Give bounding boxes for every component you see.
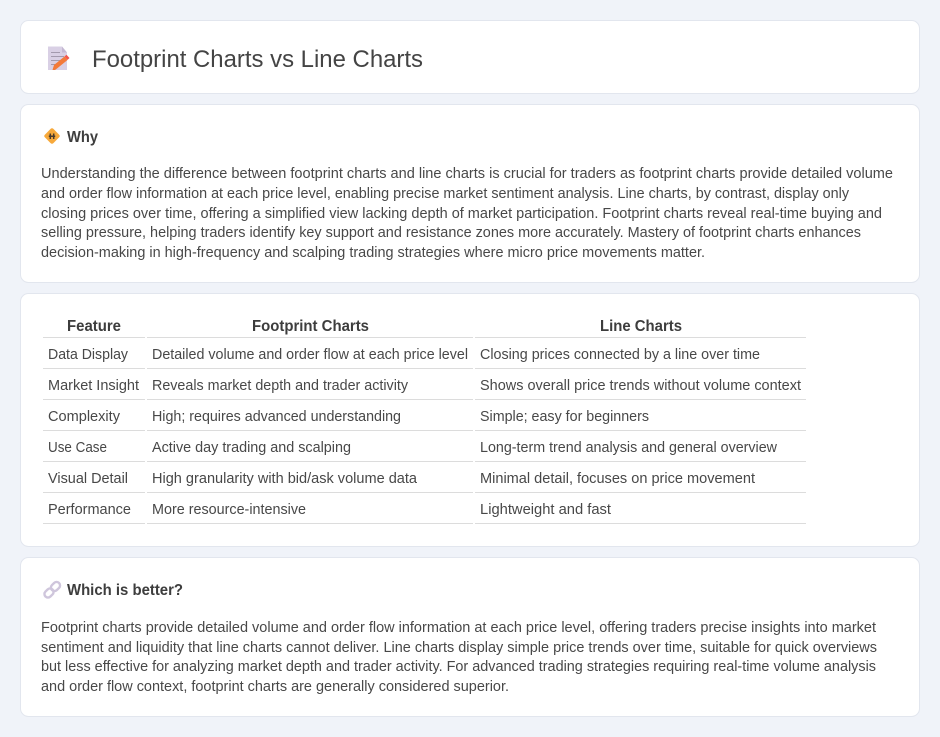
table row: use case: Active day trading and scalping xyxy=(152,440,351,456)
table row: visual detail xyxy=(43,471,806,492)
text block: why explanation: decision-making in high-frequency and scalping trading strategies where micro price movements matter. xyxy=(41,245,705,261)
table row: market insight xyxy=(43,378,806,400)
table row: market insight: Reveals market depth and trader activity xyxy=(152,378,409,394)
table row: performance: Lightweight and fast xyxy=(480,502,611,518)
text block: verdict: but less effective for analyzing market depth and trader activity. For advanced trading strategies requiring real-time volume analysis xyxy=(41,659,876,675)
table row: complexity: Simple; easy for beginners xyxy=(480,409,649,425)
heading: which is better: Which is better? xyxy=(67,582,183,599)
title: Footprint Charts vs Line Charts xyxy=(92,46,423,73)
table row: market insight: Market Insight xyxy=(48,378,139,394)
text block: why explanation: and order flow information at each price level, enabling precise market sentiment analysis. Line charts, by contrast, display only xyxy=(41,186,850,202)
table row: data display: Closing prices connected by a line over time xyxy=(480,347,760,363)
panel: why xyxy=(20,104,920,282)
table row: visual detail: High granularity with bid/ask volume data xyxy=(152,471,417,487)
table row: data display xyxy=(43,347,806,368)
table row: complexity: Complexity xyxy=(48,409,121,425)
icon: warning diamond xyxy=(44,128,60,144)
text block: verdict: sentiment and liquidity that line charts cannot deliver. Line charts display simple price trends over time, suitable for quick overviews xyxy=(41,640,877,656)
table row: visual detail: Visual Detail xyxy=(48,471,128,487)
table row: use case: Long-term trend analysis and general overview xyxy=(480,440,778,456)
table row: use case: Use Case xyxy=(48,440,107,456)
text block: why explanation: Understanding the difference between footprint charts and line charts is crucial for traders as footprint charts provide detailed volume xyxy=(41,166,893,182)
text block: verdict: and order flow context, footprint charts are generally considered superior. xyxy=(41,679,509,695)
text block: verdict: Footprint charts provide detailed volume and order flow information at each price level, offering traders precise insights into market xyxy=(41,620,876,636)
table row: performance: More resource-intensive xyxy=(152,502,306,518)
table row: market insight: Shows overall price trends without volume context xyxy=(480,378,801,394)
text block: why explanation: closing prices over time, offering a simplified view lacking depth of market participation. Footprint charts reveal real-time buying and xyxy=(41,206,882,222)
table row: visual detail: Minimal detail, focuses on price movement xyxy=(480,471,755,487)
heading: why: Why xyxy=(67,129,98,146)
table row: complexity xyxy=(43,409,806,430)
panel: which is better xyxy=(20,558,920,716)
panel: title header xyxy=(20,20,920,94)
table row: data display: Data Display xyxy=(48,347,129,363)
table row: complexity: High; requires advanced understanding xyxy=(152,409,401,425)
text block: why explanation: selling pressure, helping traders identify key support and resistance zones more accurately. Mastery of footprint charts enhances xyxy=(41,225,861,241)
text block: verdict xyxy=(41,620,877,695)
table header: Line Charts xyxy=(600,318,682,335)
table header xyxy=(43,318,806,338)
text block: why explanation xyxy=(41,166,893,261)
table header: Feature xyxy=(67,318,121,335)
icon: chain link xyxy=(43,580,62,599)
panel: comparison table xyxy=(20,294,920,546)
table row: performance xyxy=(43,502,806,524)
table row: use case xyxy=(43,440,806,462)
table header: Footprint Charts xyxy=(252,318,369,335)
icon: document with pencil xyxy=(48,46,70,70)
table row: data display: Detailed volume and order flow at each price level xyxy=(152,347,468,363)
table row: performance: Performance xyxy=(48,502,131,518)
